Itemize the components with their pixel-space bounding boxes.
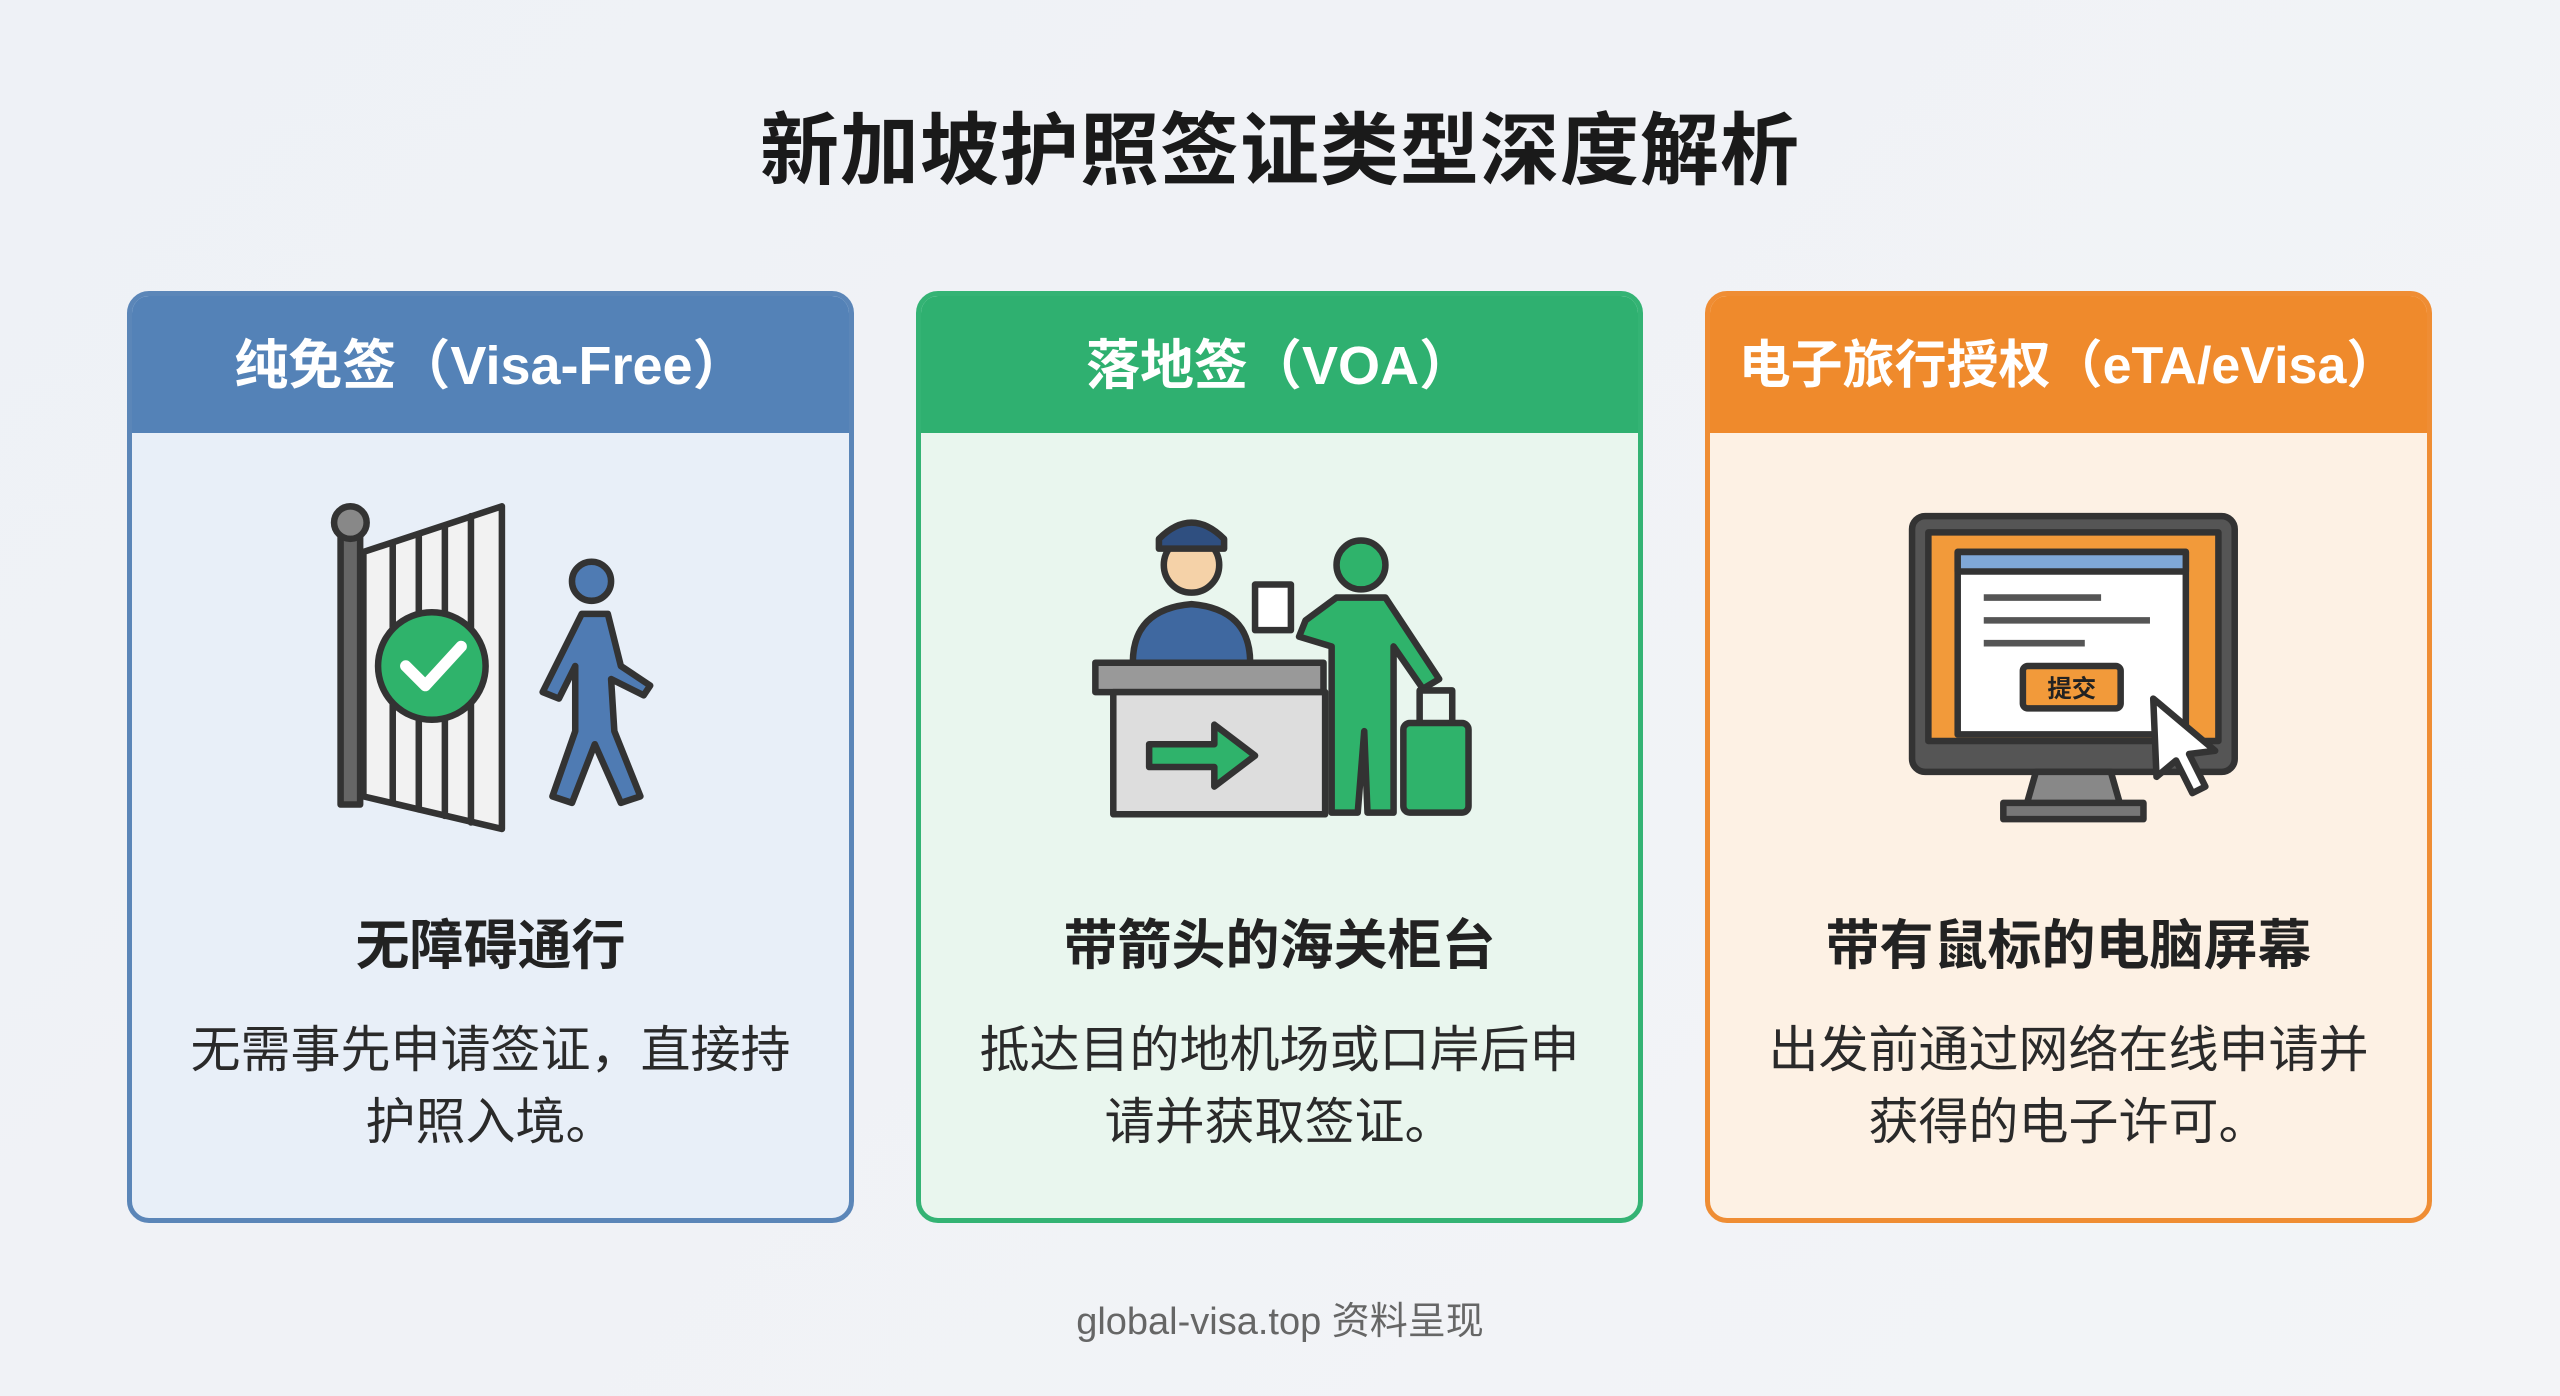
header: eTA: 电子旅行授权（eTA/eVisa） (1739, 337, 2398, 395)
panel: VOA (916, 291, 1643, 1223)
icon: computer with cursor: 提交 (2047, 675, 2096, 703)
description: 无需事先申请签证，直接持护照入境。 (190, 1022, 790, 1150)
icon: computer with cursor (1908, 512, 2238, 822)
footer: global-visa.top 资料呈现 (1076, 1301, 1484, 1343)
description: 抵达目的地机场或口岸后申请并获取签证。 (980, 1022, 1580, 1150)
subtitle: 无障碍通行 (356, 916, 626, 976)
panel: visa-free (127, 291, 854, 1223)
header: visa-free: 纯免签（Visa-Free） (234, 336, 747, 396)
header: eTA (1710, 296, 2427, 433)
subtitle: 带有鼠标的电脑屏幕 (1826, 916, 2312, 976)
description: 出发前通过网络在线申请并获得的电子许可。 (1768, 1022, 2368, 1150)
title: 新加坡护照签证类型深度解析 (760, 106, 1800, 195)
icon: customs counter (1092, 519, 1472, 818)
subtitle: 带箭头的海关柜台 (1064, 916, 1496, 976)
header: visa-free (132, 296, 849, 433)
header: VOA: 落地签（VOA） (1086, 336, 1473, 396)
header: VOA (921, 296, 1638, 433)
icon: gate and walker (330, 503, 654, 832)
panel: eTA (1705, 291, 2432, 1223)
